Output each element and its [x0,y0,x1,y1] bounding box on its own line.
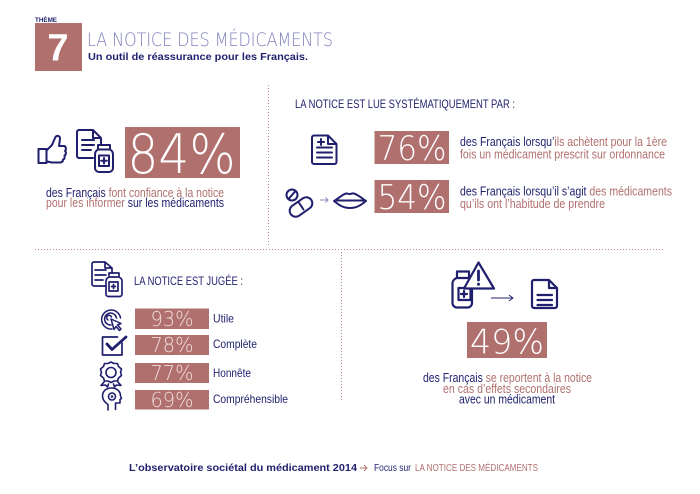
bar 78% [135,333,209,357]
heading: LA NOTICE EST LUE SYSTÉMATIQUEMENT PAR : [295,98,515,111]
text 54% [460,184,672,211]
caption: des Français se reportent à la notice [423,371,592,385]
text 54%: des Français lorsqu’il s’agit des médicaments [460,184,672,198]
panel: confiance [38,123,240,210]
caption: en cas d’effets secondaires [443,382,571,396]
icon: rosette [100,362,122,387]
panel: la notice est jugée [92,262,288,412]
icon: check box [102,337,126,355]
icon: thumbs up [38,136,66,163]
text 76%: des Français lorsqu’ils achètent pour la 1ère [460,135,667,149]
icon: prescription document [312,136,336,164]
caption: pour les informer sur les médicaments [46,196,224,210]
icon: target [102,310,121,330]
theme number badge: 7 [47,28,69,70]
stat 84%: 84% [128,123,236,186]
caption [423,371,592,406]
bar 77%: 77% [150,361,194,385]
subtitle: Un outil de réassurance pour les Français. [88,51,308,63]
label: Honnête [213,366,251,380]
icon: head with gear [102,388,122,410]
label: Compréhensible [213,392,288,406]
text 54%: qu’ils ont l’habitude de prendre [460,197,605,211]
footer focus: Focus sur [374,462,411,474]
icon: notice and medicine bottle [92,262,122,296]
caption: des Français font confiance à la notice [46,186,224,200]
bar 69%: 69% [150,388,194,412]
bar 93%: 93% [150,307,194,331]
stat 49%: 49% [470,322,544,362]
header [35,16,333,71]
theme number badge [35,23,82,71]
icon: document [532,280,557,308]
text 76% [460,135,667,162]
row: compréhensible [102,388,288,412]
row: honnête [100,361,251,387]
panel: lecture systématique [286,98,672,219]
theme label: THÈME [35,16,57,24]
bar 78%: 78% [150,333,194,357]
caption [46,186,224,210]
row: utile [102,307,234,331]
icon: pills to mouth [286,190,366,219]
bar 69% [135,388,209,412]
footer topic: LA NOTICE DES MÉDICAMENTS [415,461,538,474]
label: Utile [213,312,234,326]
heading: LA NOTICE EST JUGÉE : [134,275,243,288]
label: Complète [213,337,257,351]
row: complète [102,333,257,357]
icon: notice and medicine bottle [77,130,113,172]
text 76%: fois un médicament prescrit sur ordonnance [460,148,665,162]
title: LA NOTICE DES MÉDICAMENTS [87,28,333,51]
stat 76%: 76% [378,129,446,169]
caption: avec un médicament [459,392,555,406]
footer source: L’observatoire sociétal du médicament 2014 [129,463,357,474]
stat 54%: 54% [378,178,446,218]
arrow [491,295,513,301]
icon: bottle with warning [452,262,494,308]
panel: effets secondaires [423,262,592,406]
footer arrow [360,465,367,471]
footer [129,461,538,474]
bar 77% [135,361,209,385]
